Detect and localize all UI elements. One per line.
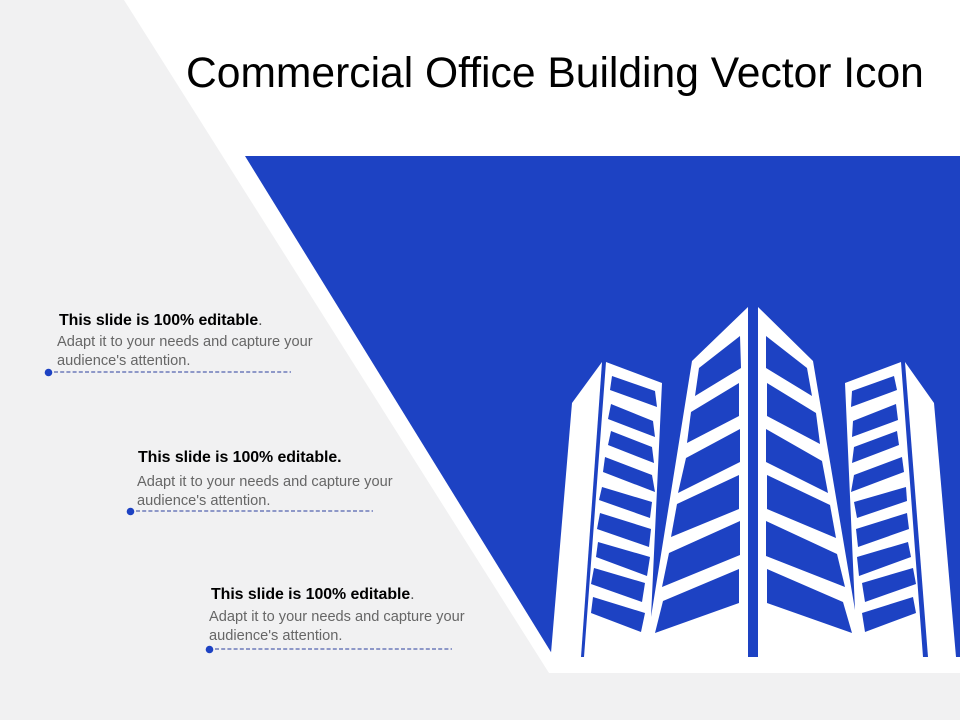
text block 1 body: audience's attention. <box>57 352 190 368</box>
text block 3 body: Adapt it to your needs and capture your <box>209 609 465 625</box>
connector 1: dot and dashed line <box>45 369 291 376</box>
connector 3: dot and dashed line <box>206 646 452 653</box>
icon: office buildings <box>551 307 956 657</box>
text block 2 body: Adapt it to your needs and capture your <box>137 474 393 490</box>
text block 1 body: Adapt it to your needs and capture your <box>57 334 313 350</box>
panel: blue diagonal <box>245 156 960 657</box>
connector 2: dot and dashed line <box>127 508 373 515</box>
text block 3 body <box>209 609 465 644</box>
text block 2 heading: This slide is 100% editable. <box>138 449 342 466</box>
text block 2 body <box>137 474 393 508</box>
text block 2 body: audience's attention. <box>137 492 270 508</box>
title: Commercial Office Building Vector Icon <box>186 49 924 97</box>
text block 1 body <box>57 334 313 368</box>
text block 2 <box>137 449 393 508</box>
windows <box>591 336 916 633</box>
text block 1 <box>57 312 313 368</box>
building faces <box>551 307 956 657</box>
text block 3 body: audience's attention. <box>209 628 342 644</box>
text block 3 heading: This slide is 100% editable. <box>211 586 415 603</box>
text block 3 <box>209 586 465 644</box>
text block 1 heading: This slide is 100% editable. <box>59 312 263 329</box>
